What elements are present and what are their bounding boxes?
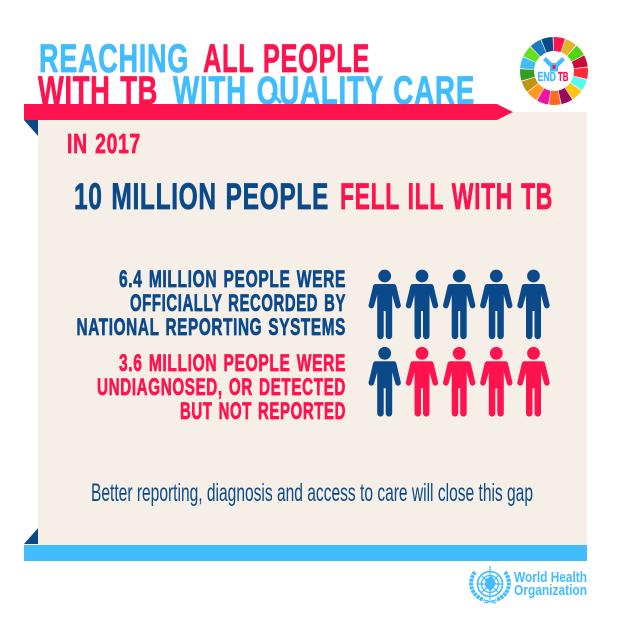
pictogram: ten people, six navy plus one navy and four red	[369, 270, 550, 417]
panel: beige background	[38, 112, 587, 545]
row 2 red people	[406, 347, 550, 417]
text block: undetected cases: UNDIAGNOSED, OR DETECTED	[97, 374, 346, 401]
headline	[74, 175, 553, 217]
WHO emblem	[471, 566, 509, 603]
text block: undetected cases	[97, 350, 346, 425]
text block: undetected cases: 3.6 MILLION PEOPLE WERE	[119, 350, 346, 377]
red ribbon arrow	[24, 104, 513, 120]
blue bottom band	[24, 545, 587, 561]
ribbon fold bottom	[24, 528, 38, 544]
row 2 navy person	[369, 347, 401, 417]
raised arms figure	[543, 57, 565, 72]
END label: END	[538, 70, 556, 84]
title line 1	[39, 37, 370, 81]
year heading: IN 2017	[67, 128, 141, 159]
Organization label: Organization	[514, 583, 587, 599]
text block: recorded cases: 6.4 MILLION PEOPLE WERE	[119, 266, 346, 293]
World Health label: World Health	[514, 570, 587, 586]
SDG colour ring	[516, 33, 592, 109]
ribbon fold top	[24, 120, 38, 136]
title line 2: WITH TB	[38, 69, 158, 113]
title line 1: ALL PEOPLE	[203, 37, 370, 81]
icon: End TB logo	[516, 33, 592, 109]
figure accent	[552, 65, 556, 69]
title line 2: WITH QUALITY CARE	[173, 69, 475, 113]
text block: recorded cases: NATIONAL REPORTING SYSTEMS	[76, 314, 346, 341]
headline navy part: 10 MILLION PEOPLE	[74, 175, 329, 217]
title	[38, 37, 475, 113]
icon: Q tail detail	[272, 93, 281, 103]
title line 1: REACHING	[39, 37, 189, 81]
text block: recorded cases	[76, 266, 346, 341]
TB label: TB	[558, 70, 568, 84]
text block: recorded cases: OFFICIALLY RECORDED BY	[130, 290, 346, 317]
row 1 navy people	[369, 270, 550, 339]
WHO logo	[471, 566, 587, 603]
title line 2	[38, 69, 475, 113]
text block: undetected cases: BUT NOT REPORTED	[180, 398, 346, 425]
